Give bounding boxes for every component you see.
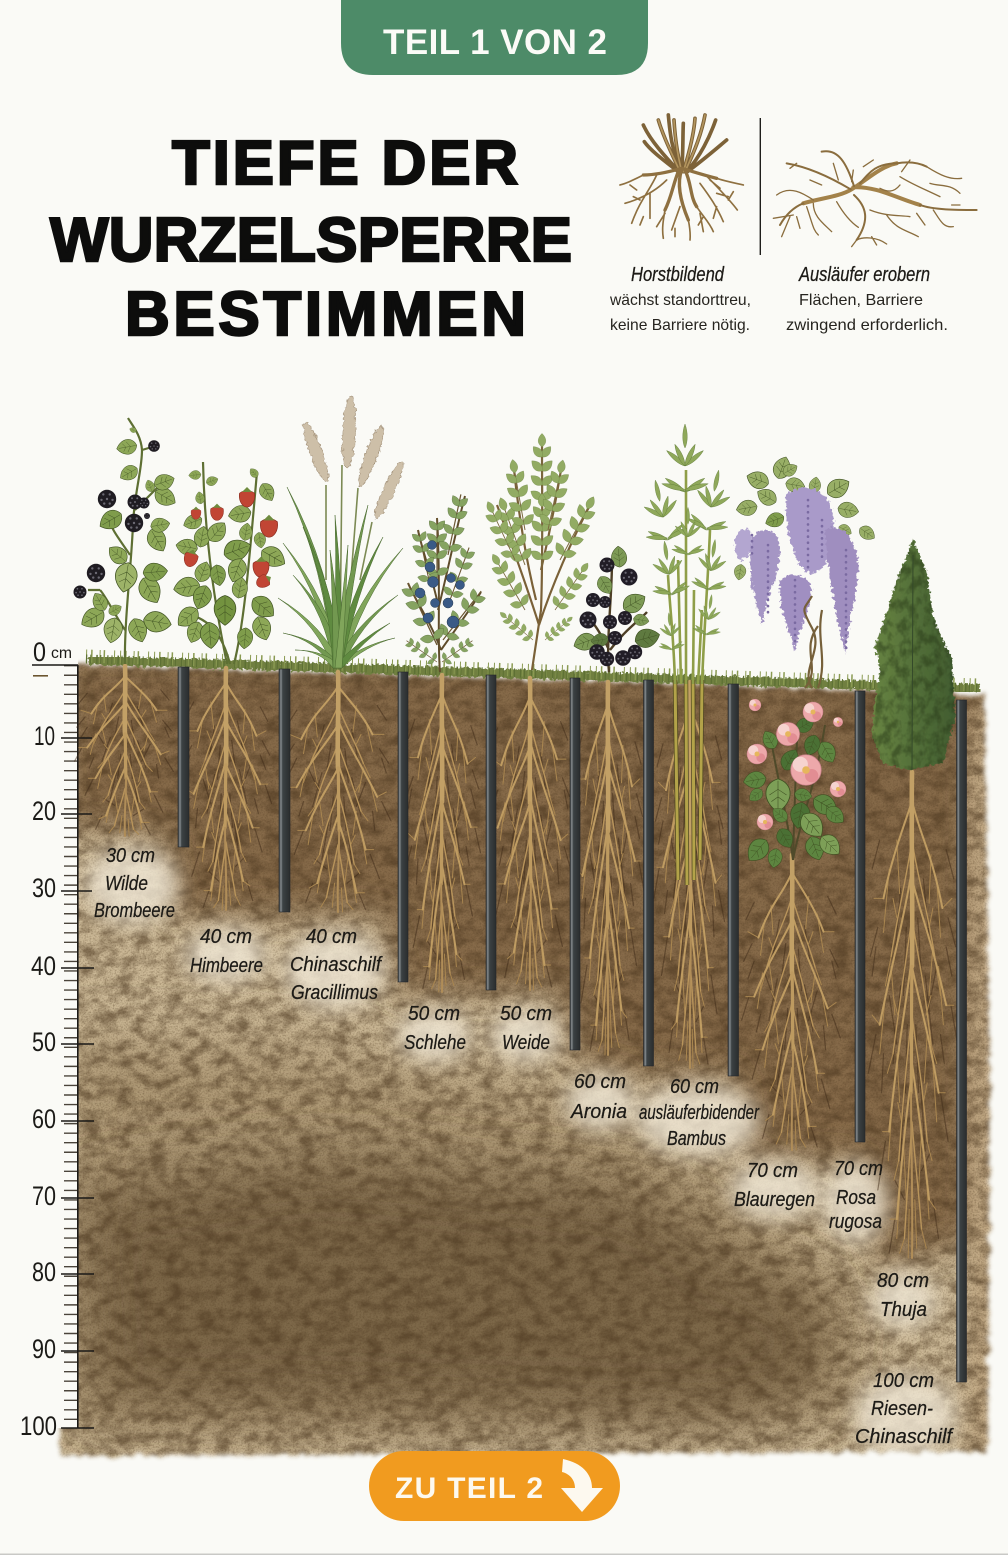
ruler: 40 [31, 951, 56, 981]
labels: Bambus: Bambus [667, 1128, 726, 1150]
labels: Aronia: Aronia [570, 1101, 627, 1123]
ruler: 0 [33, 637, 46, 667]
root barriers [178, 667, 966, 1382]
ground grass strip [86, 656, 980, 689]
button: to part 2: ZU TEIL 2 [395, 1472, 543, 1505]
legend text: runners: zwingend erforderlich. [786, 317, 948, 334]
roots: Weide [487, 678, 571, 990]
soil cross-section [40, 640, 1008, 1480]
roots: wilde Brombeere [75, 666, 173, 836]
roots: Himbeere [182, 668, 272, 910]
legend text: runners [786, 264, 948, 334]
plant: Himbeere [172, 462, 289, 664]
labels: Thuja [877, 1270, 929, 1321]
labels: Bambus: ausläuferbidender [639, 1102, 760, 1124]
labels: Weide: 50 cm [500, 1003, 552, 1025]
roots: Aronia [574, 682, 644, 1055]
ruler: 70 [32, 1181, 56, 1211]
plant: Thuja [872, 538, 955, 770]
ruler: 80 [32, 1257, 56, 1287]
legend text: clump forming: keine Barriere nötig. [610, 317, 750, 334]
labels: Riesen-Chinaschilf: 100 cm [873, 1370, 934, 1392]
labels: Riesen-Chinaschilf [855, 1370, 954, 1448]
banner: part 1 of 2 [341, 0, 648, 75]
plant: Rosa rugosa [742, 699, 848, 869]
roots: Thuja [868, 772, 958, 1258]
labels: Bambus: 60 cm [670, 1076, 719, 1098]
title: BESTIMMEN [125, 280, 526, 349]
icon: arrow [561, 1459, 603, 1512]
title: WURZELSPERRE [50, 206, 572, 275]
plant: Blauregen [733, 454, 878, 688]
ruler: 30 [32, 873, 56, 903]
icon: clump-forming root [620, 115, 743, 240]
ruler: 20 [32, 796, 56, 826]
labels: Rosa rugosa: Rosa [836, 1187, 876, 1209]
labels: Himbeere: Himbeere [190, 955, 263, 977]
labels: wilde Brombeere [94, 845, 175, 922]
labels: Riesen-Chinaschilf: Chinaschilf [855, 1426, 954, 1448]
ruler [20, 637, 94, 1441]
labels: Weide: Weide [502, 1032, 550, 1054]
labels: Rosa rugosa: 70 cm [834, 1158, 883, 1180]
labels: Bambus [639, 1076, 760, 1150]
bamboo rhizome canes in soil [675, 680, 702, 885]
labels: Schlehe: Schlehe [404, 1032, 466, 1054]
labels: Aronia: 60 cm [574, 1071, 626, 1093]
labels: Riesen-Chinaschilf: Riesen- [871, 1398, 933, 1420]
plant: ausläuferbildender Bambus [634, 424, 740, 684]
legend text: runners: Flächen, Barriere [799, 292, 923, 309]
legend text: clump forming [609, 264, 751, 334]
labels: wilde Brombeere: 30 cm [106, 845, 155, 867]
icon: runner root [773, 151, 977, 247]
plant: wilde Brombeere [74, 418, 179, 664]
labels: Chinaschilf Gracillimus [290, 926, 383, 1004]
roots: Bambus [654, 682, 724, 1068]
labels: Rosa rugosa [829, 1158, 883, 1233]
title: TIEFE DER [172, 129, 518, 198]
plant: Aronia [571, 546, 662, 672]
banner: part 1 of 2: TEIL 1 VON 2 [383, 23, 607, 62]
ruler: cm [51, 645, 72, 662]
labels: Schlehe [404, 1003, 466, 1054]
plant: Schlehe [395, 492, 492, 672]
labels: Blauregen: 70 cm [747, 1160, 798, 1182]
labels: Chinaschilf Gracillimus: Chinaschilf [290, 954, 383, 976]
legend text: clump forming: Horstbildend [631, 264, 725, 286]
ruler: 60 [32, 1104, 56, 1134]
labels: Chinaschilf Gracillimus: Gracillimus [291, 982, 378, 1004]
labels: Rosa rugosa: rugosa [829, 1211, 882, 1233]
divider [760, 118, 761, 255]
legend text: runners: Ausläufer erobern [798, 264, 930, 286]
button: to part 2 [369, 1451, 620, 1521]
legend text: clump forming: wächst standorttreu, [609, 292, 751, 309]
plant: Chinaschilf [278, 396, 408, 668]
labels: wilde Brombeere: Wilde [105, 873, 148, 895]
labels: Blauregen: Blauregen [734, 1189, 815, 1211]
roots: Chinaschilf [283, 672, 391, 912]
labels: Thuja: 80 cm [877, 1270, 929, 1292]
labels: Himbeere [190, 926, 263, 977]
roots: Schlehe [405, 675, 480, 992]
labels: Weide [500, 1003, 552, 1054]
labels: wilde Brombeere: Brombeere [94, 900, 175, 922]
title [50, 129, 572, 349]
labels: Himbeere: 40 cm [200, 926, 252, 948]
ruler: 10 [34, 721, 55, 751]
ruler: 100 [20, 1411, 57, 1441]
roots: Rosa and Blauregen [742, 855, 840, 1150]
labels: Aronia [570, 1071, 627, 1123]
labels: Blauregen [734, 1160, 815, 1211]
labels: Schlehe: 50 cm [408, 1003, 460, 1025]
labels: Thuja: Thuja [880, 1299, 927, 1321]
ruler: 90 [32, 1334, 56, 1364]
plant: Weide [477, 433, 606, 670]
ruler: 50 [32, 1027, 56, 1057]
labels: Chinaschilf Gracillimus: 40 cm [306, 926, 357, 948]
